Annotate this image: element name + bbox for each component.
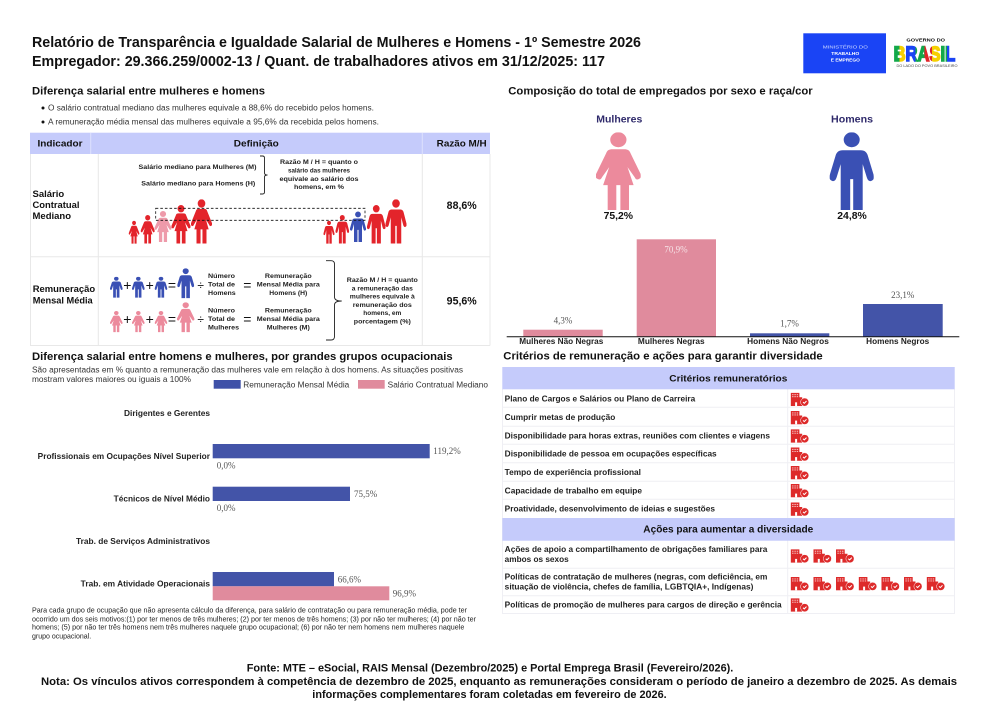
footnote: homens; (5) por não ter três homens nem três mulheres naquele grupo ocupacional; (6) por não ter nem homens nem mulheres naquele [32,624,464,632]
icons: women sum equation: + [123,311,131,327]
dashed median connector [156,208,365,220]
column chart: 23,1% [891,290,915,300]
bar chart: 0,0% [217,503,236,513]
column chart: 4,3% [554,315,573,325]
band: ações para aumentar a diversidade: Ações para aumentar a diversidade [643,525,814,536]
column chart: 70,9% [664,244,688,254]
logo: Ministério do Trabalho e Emprego [803,33,886,73]
value: 88,6% [447,200,477,212]
criteria list [505,393,809,516]
bar chart: 96,9% [393,588,416,598]
ratio definition text: a remuneração das [352,285,413,292]
actions list: ambos os sexos [505,555,569,564]
criteria list: Proatividade, desenvolvimento de ideias e sugestões [505,505,716,514]
ratio definition text: salário das mulheres [288,168,350,174]
ratio definition text: equivale ao salário dos [280,176,359,183]
column chart: 1,7% [780,319,799,329]
women share: 75,2% [604,211,633,222]
bullet text block: O salário contratual mediano das mulheres equivale a 88,6% do recebido pelos homens. [48,104,374,113]
row: remuneração mensal média [33,261,477,340]
icons: men sum equation: + [146,277,154,293]
description: São apresentadas em % quanto a remuneração das mulheres vale em relação à dos homens. As situações positivas [32,365,463,374]
logo: Governo do Brasil: BRASIL [894,43,955,66]
ratio definition text: homens, em [363,310,401,317]
formula text: homens: Mensal Média para [257,282,320,289]
criteria list: Disponibilidade para horas extras, reuniões com clientes e viagens [505,431,770,440]
large brace [326,261,342,340]
heading: Critérios de remuneração e ações para garantir diversidade [503,350,823,362]
icons: women sum equation [110,302,204,332]
bullet text block [42,104,379,127]
grid lines and bands [502,367,955,614]
bar chart: Trab. em Atividade Operacionais [81,580,210,589]
panel: diferença salarial [30,86,490,345]
logo: Ministério do Trabalho e Emprego: MINISTÉRIO DO [823,43,868,49]
column chart: Mulheres Não Negras [519,337,604,346]
bar chart: Técnicos de Nível Médio [114,495,210,504]
table header: Indicador [38,139,83,150]
actions list: Ações de apoio a compartilhamento de obrigações familiares para [505,545,768,554]
legend: Salário Contratual Mediano [388,380,489,389]
table header [38,139,487,150]
formula text: mulheres: Número [208,308,235,315]
criteria list: Cumprir metas de produção [505,413,615,422]
column chart: Homens Não Negros [747,337,830,346]
formula text: homens: Homens [208,290,236,297]
logo: Ministério do Trabalho e Emprego: E EMPREGO [831,58,860,63]
actions list: Políticas de contratação de mulheres (negras, com deficiência, em [505,572,767,581]
column chart: Mulheres Negras [638,337,705,346]
footer source note: Fonte: MTE – eSocial, RAIS Mensal (Dezembro/2025) e Portal Emprega Brasil (Fevereiro/2026). [247,662,733,674]
formula text: homens: = [243,277,251,293]
ratio definition text: mulheres equivale à [350,294,415,301]
formula text: mulheres: Mulheres [208,324,239,332]
logo: Governo do Brasil: DO LADO DO POVO BRASILEIRO [896,64,958,68]
men share: 24,8% [837,211,867,222]
panel: composição por sexo e raça/cor [507,86,959,346]
logo: Governo do Brasil [894,38,958,68]
title: Relatório de Transparência e Igualdade Salarial de Mulheres e Homens - 1º Semestre 2026 [32,35,641,51]
criteria list: Capacidade de trabalho em equipe [505,486,643,495]
logo: Ministério do Trabalho e Emprego: TRABALHO [831,51,860,56]
ratio definition text: porcentagem (%) [354,318,411,325]
bar chart: Trab. de Serviços Administrativos [76,537,210,546]
table header: Razão M/H [437,139,487,150]
legend [214,380,489,389]
ratio definition text [347,277,418,325]
logo: Governo do Brasil: GOVERNO DO [906,38,946,43]
row: salário contratual mediano: Salário mediano para Homens (H) [141,181,255,188]
table header: Definição [234,139,279,150]
formula text: mulheres: Mensal Média para [257,316,320,323]
footer source note: informações complementares foram coletadas em fevereiro de 2026. [312,689,667,701]
row: salário contratual mediano: Mediano [32,211,71,222]
icons: men sum equation: + [123,277,131,293]
bar chart: 66,6% [338,575,361,585]
footnote [32,607,477,640]
row: salário contratual mediano [32,156,477,244]
footnote: grupo ocupacional. [32,633,91,640]
formula text: homens: Total de [208,282,235,289]
row: salário contratual mediano: Salário mediano para Mulheres (M) [138,164,256,171]
men share: Homens [831,114,873,125]
formula text: homens: Homens (H) [269,290,307,297]
icons: men sum equation [110,268,204,298]
column chart [507,239,959,346]
indicator table [30,133,490,346]
bar chart: 0,0% [217,460,236,470]
icons: women sum equation: ÷ [197,312,204,326]
footnote: Para cada grupo de ocupação que não apresenta cálculo da diferença, para salário de contratação ou para remuneração média, pode ter [32,607,468,614]
row: salário contratual mediano: Salário [32,189,64,200]
ratio definition text [280,159,359,191]
actions list: Políticas de promoção de mulheres para cargos de direção e gerência [505,600,782,609]
brace [260,156,268,194]
women share [596,114,643,222]
formula text: mulheres: Total de [208,316,235,323]
bar chart: 119,2% [433,446,461,456]
footer source note [41,662,957,701]
formula text: mulheres: Mulheres (M) [267,324,310,332]
men share [829,114,874,222]
row: remuneração mensal média: Remuneração [33,284,95,295]
band: critérios remuneratórios: Critérios remuneratórios [669,373,787,384]
bar chart [38,409,461,600]
women share: Mulheres [596,114,643,125]
heading: Diferença salarial entre homens e mulheres, por grandes grupos ocupacionais [32,351,453,363]
ratio definition text: homens, em % [294,184,344,191]
formula text: mulheres: Remuneração [265,308,312,315]
description [32,365,463,384]
icons: men sum equation: = [168,277,176,293]
icons: men ordered by salary [323,199,407,244]
legend: Remuneração Mensal Média [243,380,350,389]
icons: women ordered by salary [129,199,212,244]
icons: women sum equation: + [146,311,154,327]
heading: Composição do total de empregados por sexo e raça/cor [508,86,814,98]
ratio definition text: remuneração dos [353,302,412,309]
criteria list: Disponibilidade de pessoa em ocupações específicas [505,450,717,459]
title: Empregador: 29.366.259/0002-13 / Quant. de trabalhadores ativos em 31/12/2025: 117 [32,54,605,70]
panel: grupos ocupacionais [32,351,489,640]
value: 95,6% [447,295,477,307]
actions list [505,545,945,612]
formula text: mulheres: = [243,311,251,327]
title [32,35,641,70]
heading: Diferença salarial entre mulheres e homens [32,86,265,98]
bar chart: Profissionais em Ocupações Nível Superior [38,452,211,461]
row: remuneração mensal média: Mensal Média [33,295,93,306]
column chart: Homens Negros [866,337,930,346]
formula text: homens: Remuneração [265,273,312,280]
formula text: homens [208,273,320,297]
bar chart: 75,5% [354,489,378,499]
panel: critérios e ações [502,350,955,614]
actions list: situação de violência, chefes de família, LGBTQIA+, Indígenas) [505,582,754,591]
ratio definition text: Razão M / H = quanto [347,277,418,284]
footnote: ocorrido um dos seis motivos:(1) por ter menos de três mulheres; (2) por ter menos de três homens; (3) por não ter mulheres; (4) por não ter [32,616,477,623]
icons: women sum equation: = [168,311,176,327]
ratio definition text: Razão M / H = quanto o [280,159,358,166]
row: salário contratual mediano: Contratual [32,200,80,211]
description: mostram valores maiores ou iguais a 100% [32,375,191,384]
criteria list: Plano de Cargos e Salários ou Plano de Carreira [505,395,696,404]
bar chart: Dirigentes e Gerentes [124,409,210,418]
bullet text block: A remuneração média mensal das mulheres equivale a 95,6% da recebida pelos homens. [48,118,379,127]
icons: men sum equation: ÷ [197,278,204,292]
footer source note: Nota: Os vínculos ativos correspondem à competência de dezembro de 2025, enquanto as remunerações consideram o período de janeiro a dezembro de 2025. As demais [41,676,957,688]
criteria list: Tempo de experiência profissional [505,468,641,477]
formula text: homens: Número [208,273,235,280]
formula text: mulheres [208,308,320,332]
